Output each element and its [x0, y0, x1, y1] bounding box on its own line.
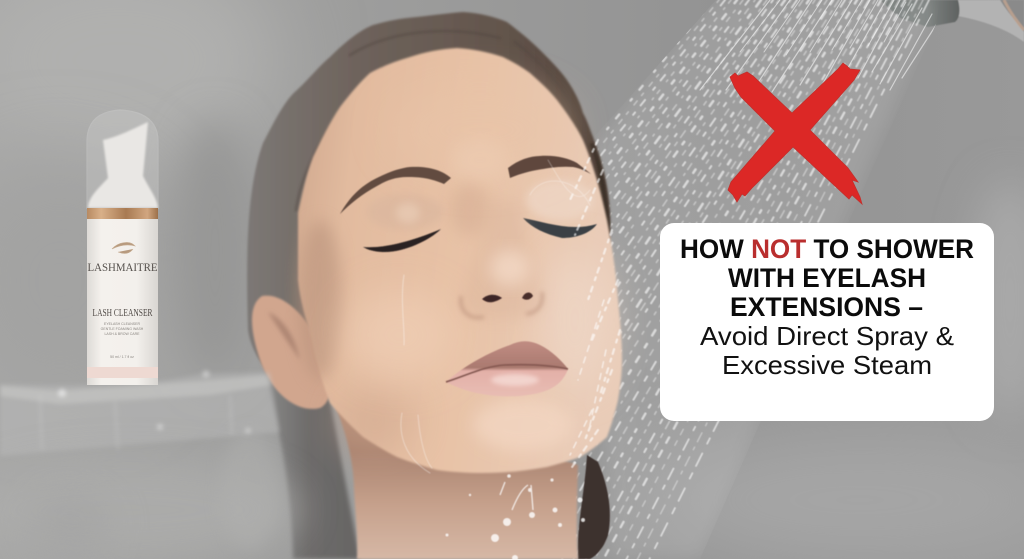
- hair strands: [296, 31, 608, 232]
- brand name: LASHMAITRE: [88, 260, 158, 274]
- shelf: [0, 370, 280, 456]
- face shape: [298, 48, 622, 473]
- water spray: [561, 0, 936, 559]
- headline card: [660, 223, 994, 421]
- right hair strand by neck: [578, 455, 610, 559]
- fine print: GENTLE FOAMING WASH: [101, 327, 144, 331]
- left closed eye lashes: [363, 229, 441, 252]
- woman: hair, neck, ear, face: [247, 12, 622, 559]
- left eyebrow: [340, 167, 451, 214]
- face shading: [298, 220, 342, 380]
- fine print: [101, 322, 144, 359]
- back hair: [247, 12, 610, 400]
- fine print: 50 ml / 1.7 fl oz: [110, 355, 134, 359]
- nose: [461, 200, 543, 319]
- gold collar: [87, 208, 158, 219]
- headline: WITH EYELASH: [728, 263, 926, 293]
- left eyelid: [367, 194, 443, 230]
- clear cap: [87, 110, 158, 208]
- right eyebrow: [508, 156, 591, 178]
- headline: [680, 234, 974, 322]
- subheading: Excessive Steam: [722, 350, 932, 380]
- ear: [252, 296, 330, 409]
- water sheet on the face: [401, 140, 620, 473]
- bottle body: [87, 219, 158, 385]
- product name: LASH CLEANSER: [92, 308, 153, 319]
- right eyelid: [526, 180, 594, 220]
- right closed eye lashes: [523, 218, 597, 238]
- subheading: [700, 321, 954, 380]
- lips: [446, 341, 568, 396]
- splashing droplets on the neck: [446, 474, 585, 559]
- neck: [335, 405, 578, 559]
- fine print: LASH & BROW CARE: [104, 332, 140, 336]
- pink band: [87, 367, 158, 378]
- fine print: EYELASH CLEANSER: [104, 322, 140, 326]
- logo mark: [112, 242, 135, 253]
- shower head: [880, 0, 1024, 42]
- product bottle: Lashmaitre lash cleanser: [87, 110, 158, 385]
- card background: [660, 223, 994, 421]
- lower hair behind neck: [255, 330, 360, 559]
- headline: EXTENSIONS –: [730, 292, 923, 322]
- pump: [88, 122, 158, 208]
- red X mark: [728, 63, 862, 204]
- headline: HOW NOT TO SHOWER: [680, 234, 974, 264]
- subheading: Avoid Direct Spray &: [700, 321, 954, 351]
- foreground steam: [0, 430, 300, 559]
